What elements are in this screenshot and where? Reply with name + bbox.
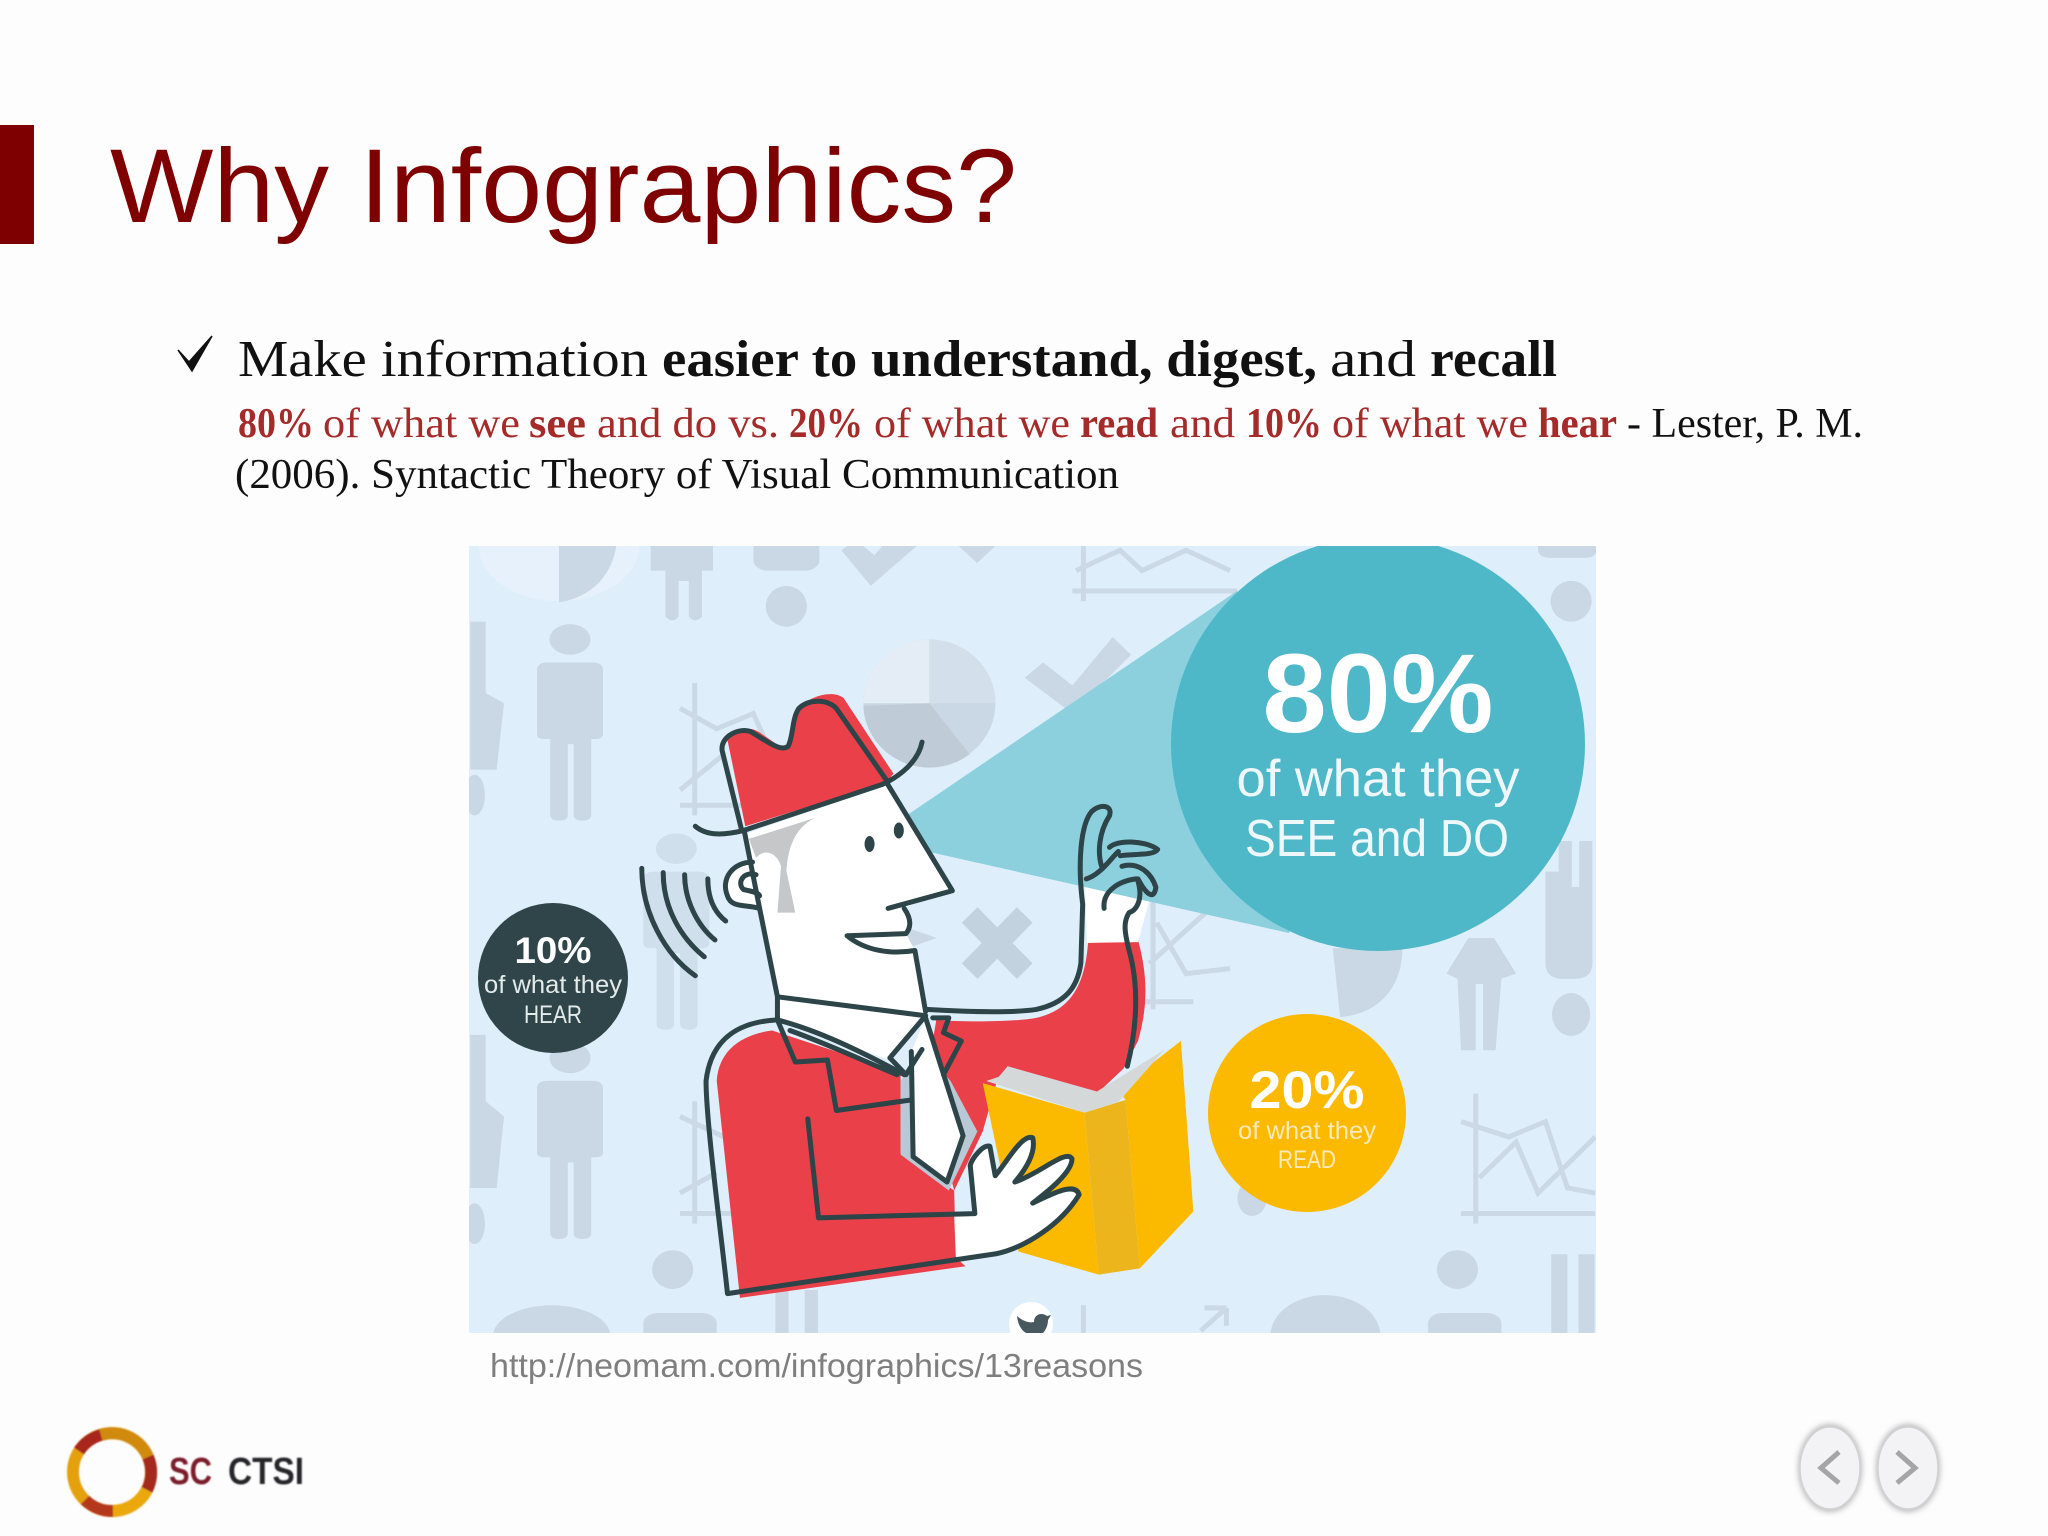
dark circle: 10 percent: 10% [514, 930, 592, 971]
tie [912, 1022, 960, 1178]
dark circle: 10 percent: of what they [484, 971, 623, 999]
bullet point: make information easier: easier to understand, digest, [662, 331, 1317, 388]
statistic text with citation: (2006). Syntactic Theory of Visual Communication [235, 452, 1119, 498]
statistic text with citation: 80% [238, 401, 314, 447]
reading hand [954, 1137, 1079, 1258]
red jacket and sleeve [717, 941, 1145, 1298]
statistic text with citation: read [1080, 401, 1158, 447]
bullet point: make information easier: recall [1430, 331, 1557, 388]
person illustration [716, 887, 1194, 1298]
statistic text with citation: of what we [323, 401, 520, 447]
source link text: http://neomam.com/infographics/13reasons [490, 1347, 1143, 1384]
hat [727, 694, 893, 826]
infographic image panel [469, 546, 1596, 1333]
next slide button [1876, 1424, 1940, 1512]
statistic text with citation: 20% [789, 401, 863, 447]
statistic text with citation: hear [1538, 401, 1617, 447]
eyes [865, 823, 904, 852]
statistic text with citation: - Lester, P. M. [1627, 401, 1863, 447]
yellow circle: 20 percent [1208, 1014, 1406, 1212]
icon: twitter badge [1009, 1302, 1053, 1333]
outlines [642, 701, 1158, 1294]
book held by reader [983, 1041, 1193, 1275]
tie shadow [900, 1074, 978, 1190]
statistic text with citation: see [529, 401, 586, 447]
teal circle: 80 percent [1171, 537, 1585, 951]
icon: check mark [178, 336, 212, 371]
face and collar [747, 784, 952, 1060]
logo ring [73, 1433, 151, 1511]
title accent bar [0, 125, 34, 244]
bullet point: make information easier [178, 331, 1557, 388]
logo: SC CTSI [73, 1433, 304, 1511]
bullet point: make information easier: Make information [238, 331, 648, 388]
statistic text with citation: 10% [1246, 401, 1322, 447]
yellow circle: 20 percent: 20% [1250, 1061, 1364, 1120]
vision cone [908, 591, 1290, 933]
statistic text with citation: of what we [1332, 401, 1528, 447]
yellow circle: 20 percent: of what they [1238, 1117, 1377, 1145]
ear [728, 865, 756, 905]
teal circle: 80 percent: SEE and DO [1245, 810, 1509, 868]
statistic text with citation: and [1170, 401, 1235, 447]
yellow circle: 20 percent: READ [1278, 1146, 1336, 1174]
teal circle: 80 percent: of what they [1236, 750, 1520, 808]
previous slide button [1798, 1424, 1862, 1512]
statistic text with citation [235, 401, 1863, 498]
person line art [642, 694, 1158, 1294]
statistic text with citation: of what we [874, 401, 1070, 447]
title: Why Infographics? [110, 128, 1017, 245]
dark circle: 10 percent: HEAR [524, 1001, 582, 1029]
bullet point: make information easier: and [1330, 331, 1416, 388]
teal circle: 80 percent: 80% [1262, 631, 1494, 756]
dark circle: 10 percent [478, 903, 628, 1053]
background pictograms [469, 546, 1596, 1333]
statistic text with citation: and do vs. [597, 401, 779, 447]
logo: SC CTSI: CTSI [228, 1451, 304, 1493]
hand pointing, white [1085, 887, 1149, 943]
logo: SC CTSI: SC [169, 1451, 212, 1493]
hair [749, 818, 815, 913]
